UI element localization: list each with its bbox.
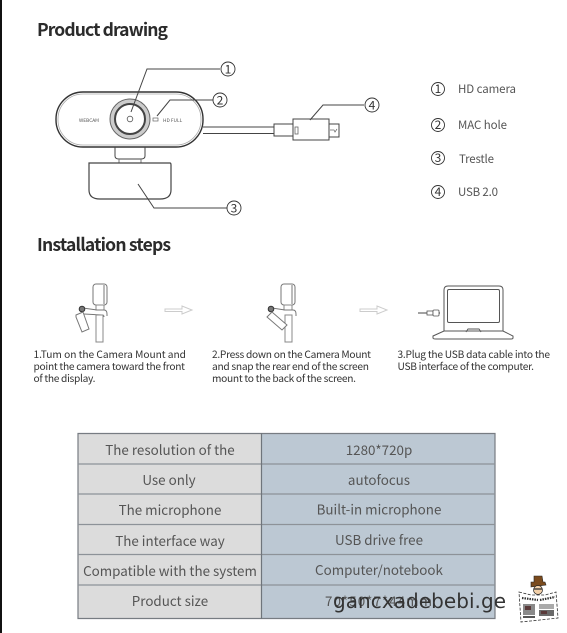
step 2 text: mount to the back of the screen.: [212, 370, 356, 385]
callout 2: 2: [217, 92, 224, 108]
specification table: [78, 433, 495, 619]
step 3 text: [398, 346, 550, 373]
callout 1: 1: [225, 60, 231, 78]
webcam body: HD FULL: [163, 117, 183, 124]
arrow: step 1 to 2: [165, 306, 192, 314]
step 1 text: point the camera toward the front: [34, 358, 185, 373]
row: product size: Product size: [132, 590, 208, 610]
step 2 text: [212, 346, 371, 385]
diagram: webcam product drawing: [56, 60, 379, 216]
row: use only: autofocus: [348, 469, 410, 489]
step 2 text: and snap the rear end of the screen: [212, 358, 369, 373]
webcam body: WEBCAM: [79, 117, 99, 124]
arrow: step 2 to 3: [360, 306, 387, 314]
legend item 3: [432, 149, 494, 167]
legend item 2: MAC hole: [458, 117, 507, 133]
row: microphone: Built-in microphone: [317, 498, 441, 518]
row: product size: 70*50*7*44mm: [325, 590, 432, 610]
row: compatibility: Computer/notebook: [315, 559, 444, 579]
step 1 illustration: [76, 284, 107, 342]
row: microphone: The microphone: [119, 499, 221, 519]
step 1 text: of the display.: [34, 370, 96, 385]
heading: installation steps: Installation steps: [37, 232, 171, 257]
legend item 3: Trestle: [459, 151, 494, 167]
callout 4: 4: [369, 96, 376, 114]
callout 3: 3: [231, 200, 237, 216]
legend item 4: [432, 183, 498, 200]
legend: part names: [432, 80, 516, 200]
row: interface: USB drive free: [335, 529, 423, 549]
step 1 text: 1.Tum on the Camera Mount and: [34, 346, 186, 361]
webcam body: [56, 92, 203, 147]
callout 1: [131, 60, 235, 112]
row: use only: [142, 469, 410, 489]
step 1 text: [34, 346, 186, 385]
watermark text: gancxadebebi.ge: [333, 589, 506, 613]
row: product size: [132, 590, 432, 610]
row: interface: [115, 529, 423, 550]
step 3 illustration: laptop and cable: [418, 286, 513, 339]
callout 4: [310, 96, 379, 120]
icon: man reading newspaper: [519, 576, 558, 622]
callout 2: [157, 92, 227, 116]
table backgrounds: [78, 433, 495, 619]
step 2 illustration: [267, 284, 296, 342]
legend item 4: USB 2.0: [458, 184, 498, 200]
row: resolution: 1280*720p: [346, 439, 412, 459]
legend item 2: [432, 116, 507, 133]
row: microphone: [119, 498, 441, 519]
row: compatibility: [83, 559, 444, 580]
legend item 4: 4: [435, 183, 442, 200]
legend item 1: HD camera: [458, 81, 516, 97]
legend item 1: 1: [435, 80, 441, 97]
row: compatibility: Compatible with the system: [83, 560, 257, 580]
row: use only: Use only: [142, 469, 196, 489]
stand and trestle: [89, 147, 171, 199]
title: product drawing: Product drawing: [37, 17, 169, 42]
row: resolution: The resolution of the: [105, 439, 235, 459]
step 3 text: USB interface of the computer.: [398, 358, 534, 373]
legend item 1: [432, 80, 516, 97]
step 3 text: 3.Plug the USB data cable into the: [398, 346, 550, 361]
row: interface: The interface way: [115, 530, 225, 550]
step 2 text: 2.Press down on the Camera Mount: [212, 346, 371, 361]
USB cable and plug: [203, 119, 339, 140]
row: resolution: [105, 439, 412, 459]
callout 3: [138, 184, 241, 216]
legend item 3: 3: [435, 149, 441, 166]
legend item 2: 2: [435, 116, 442, 133]
